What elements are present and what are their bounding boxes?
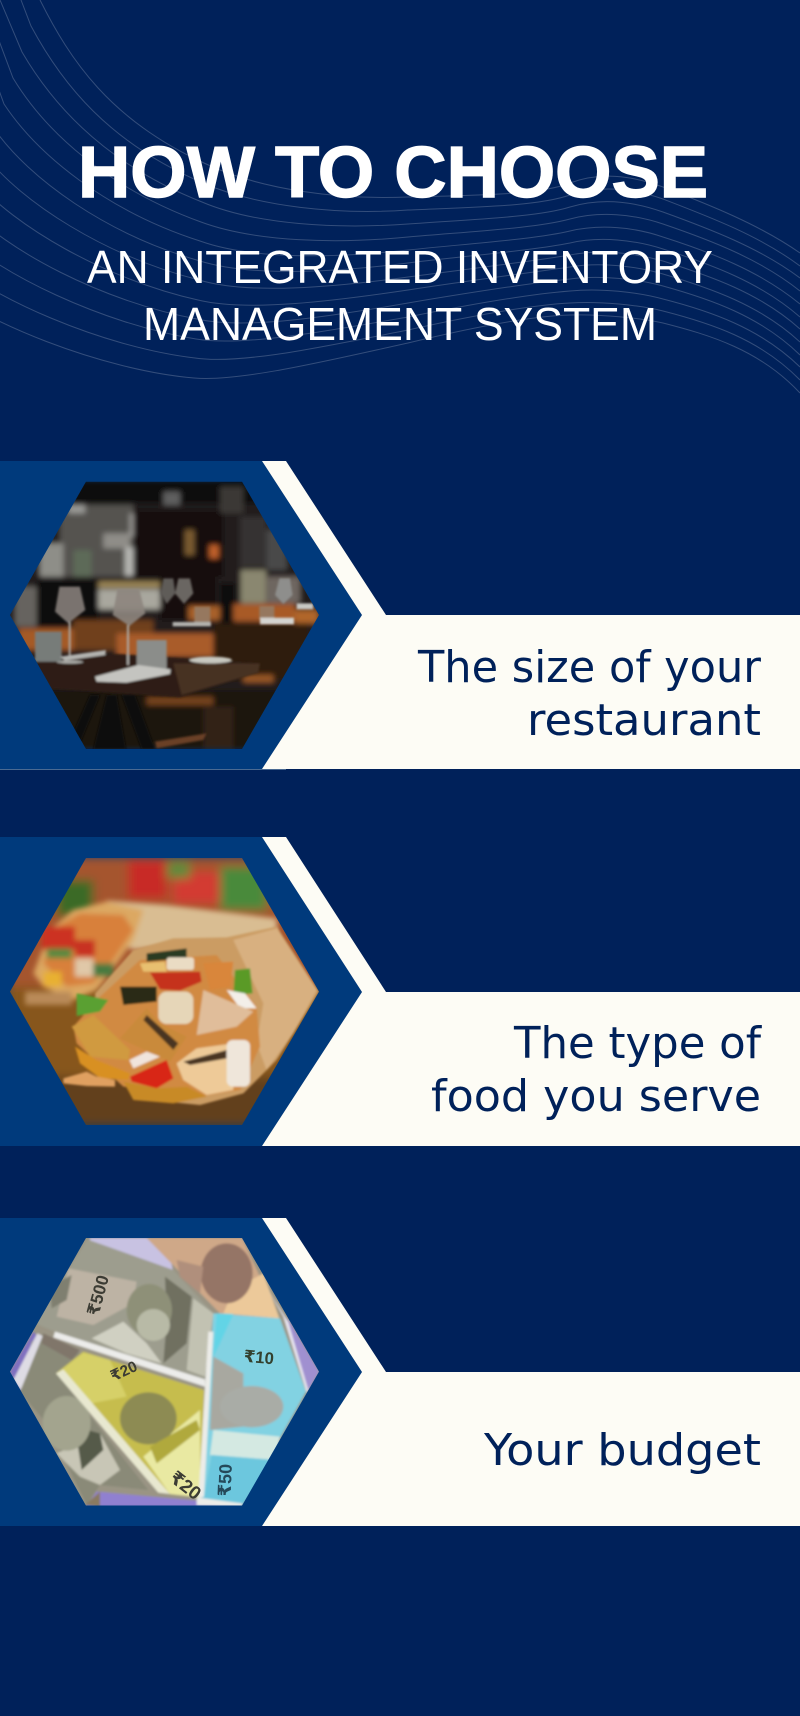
panel 1 cream band xyxy=(262,461,800,769)
teal ₹50 note xyxy=(199,1313,306,1506)
banknote values: ₹20 xyxy=(108,1358,140,1385)
subtitle: MANAGEMENT SYSTEM xyxy=(143,298,657,350)
panel 3 label: Your budget xyxy=(483,1425,761,1476)
panel: budget xyxy=(0,1218,800,1526)
photo: rupee notes in hexagon xyxy=(7,1237,323,1507)
table xyxy=(32,654,260,697)
tortilla xyxy=(95,927,319,1105)
panel: type of food xyxy=(0,837,800,1146)
title: HOW TO CHOOSE xyxy=(78,133,708,213)
panel 2 label xyxy=(431,1018,762,1122)
grey ₹500 note xyxy=(38,1240,202,1372)
napkins and plate xyxy=(95,665,171,683)
brown note xyxy=(146,1238,260,1315)
panel 2 label: The type of xyxy=(513,1018,762,1069)
panel 2 cream band xyxy=(262,837,800,1146)
yellow ₹20 note xyxy=(56,1352,204,1497)
photo: restaurant interior in hexagon xyxy=(7,480,323,750)
panel 1 label: The size of your xyxy=(417,642,762,693)
panel: size of restaurant xyxy=(0,461,800,770)
photo: burrito wrap in hexagon xyxy=(7,857,323,1127)
banknote values: ₹20 xyxy=(166,1467,205,1504)
table legs xyxy=(72,695,100,743)
panel 1 label xyxy=(417,642,762,746)
panel 1 label: restaurant xyxy=(527,695,761,746)
bottom purple note xyxy=(86,1490,219,1506)
wine glasses xyxy=(55,587,85,623)
panel 2 label: food you serve xyxy=(431,1071,761,1122)
banknote values: ₹10 xyxy=(243,1347,275,1368)
subtitle: AN INTEGRATED INVENTORY xyxy=(87,241,713,293)
banknote values: ₹50 xyxy=(215,1464,236,1497)
panel 2 blue arrow xyxy=(0,837,362,1146)
banknote values: ₹500 xyxy=(83,1273,113,1318)
left grey note xyxy=(19,1333,148,1505)
panel 3 cream band xyxy=(262,1218,800,1526)
panel 3 blue arrow xyxy=(0,1218,362,1526)
subtitle xyxy=(87,241,713,350)
tumblers xyxy=(35,632,62,662)
lilac edge right xyxy=(270,1294,310,1393)
filling xyxy=(73,955,260,1097)
banknote values xyxy=(83,1273,275,1504)
decorative wave lines xyxy=(0,0,800,393)
left purple note xyxy=(10,1331,37,1390)
purple note top xyxy=(90,1238,173,1273)
panel 1 blue arrow xyxy=(0,461,362,769)
